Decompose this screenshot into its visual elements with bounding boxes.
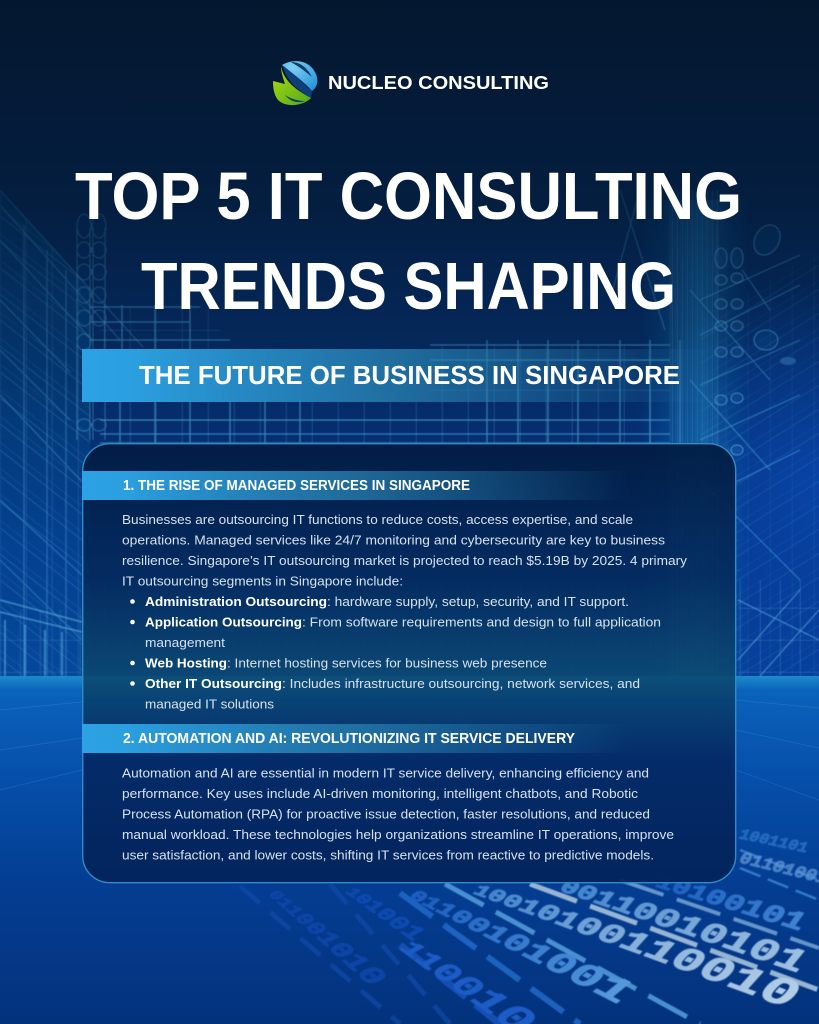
wireframe buildings background — [0, 190, 819, 680]
brand name: NUCLEO CONSULTING — [328, 73, 549, 93]
section 1 paragraph: IT outsourcing segments in Singapore include: — [122, 574, 403, 588]
row upper right: 10100101 — [649, 867, 813, 938]
section 1 bullet list — [130, 594, 661, 712]
section 1 bullet list: managed IT solutions — [145, 696, 274, 712]
content panel — [82, 444, 736, 883]
section 1 paragraph: resilience. Singapore’s IT outsourcing market is projected to reach $5.19B by 2025. 4 primary — [122, 553, 687, 568]
left ellipse towers — [77, 214, 106, 440]
section 1 bullet list: Administration Outsourcing — [145, 594, 327, 609]
central low building — [90, 305, 740, 676]
section 1 bullet list: management — [145, 635, 225, 650]
section 1 paragraph: Businesses are outsourcing IT functions to reduce costs, access expertise, and scale — [122, 512, 633, 527]
section 2 header bar: 2. AUTOMATION AND AI: REVOLUTIONIZING IT SERVICE DELIVERY — [123, 731, 575, 747]
title: TRENDS SHAPING — [141, 249, 676, 324]
subtitle banner: THE FUTURE OF BUSINESS IN SINGAPORE — [139, 360, 680, 390]
icon: globe logo — [273, 61, 317, 105]
section 1 bullet list: Web Hosting — [145, 656, 227, 670]
ground plane with horizon — [0, 676, 819, 1024]
section 2 paragraph: user satisfaction, and lower costs, shifting IT services from reactive to predictive models. — [122, 848, 654, 862]
section 2 paragraph: Automation and AI are essential in modern IT service delivery, enhancing efficiency and — [122, 766, 649, 780]
section 2 paragraph: manual workload. These technologies help organizations streamline IT operations, improve — [122, 827, 674, 842]
section 2 paragraph: Process Automation (RPA) for proactive issue detection, faster resolutions, and reduced — [122, 806, 650, 822]
left building — [0, 190, 143, 676]
row faded left b: 101001 — [338, 882, 431, 946]
right dense towers — [610, 190, 819, 680]
section 1 bullet list: : From software requirements and design to full application — [302, 614, 661, 630]
logo — [273, 61, 549, 105]
title: TOP 5 IT CONSULTING — [75, 159, 742, 234]
row main a: 00110010101 — [551, 867, 817, 981]
section 1 bullet list: : Includes infrastructure outsourcing, network services, and — [282, 676, 640, 691]
row main b: 10010100110010 — [463, 866, 811, 1018]
row main c: 01100101001 — [398, 876, 644, 1012]
section 1 paragraph: operations. Managed services like 24/7 monitoring and cybersecurity are key to business — [122, 532, 665, 548]
subtitle banner — [82, 349, 722, 402]
title — [75, 159, 742, 324]
section 1 bullet list: Application Outsourcing — [145, 614, 302, 630]
section 1 header bar: 1. THE RISE OF MANAGED SERVICES IN SINGAPORE — [123, 478, 470, 494]
section 2 header bar — [82, 724, 627, 753]
section 2 paragraph: performance. Key uses include AI-driven monitoring, intelligent chatbots, and Robotic — [122, 786, 638, 801]
section 1 header bar — [82, 471, 627, 500]
section 1 bullet list: Other IT Outsourcing — [145, 676, 282, 691]
binary digit rows — [240, 827, 819, 1024]
section 2 paragraph — [122, 766, 674, 862]
section 1 paragraph — [122, 512, 687, 588]
section 1 bullet list: : Internet hosting services for business web presence — [227, 656, 547, 670]
section 1 bullet list: : hardware supply, setup, security, and IT support. — [327, 594, 629, 609]
row faded left a: 011001010 — [259, 883, 395, 990]
rows beside panel: 1001101 — [736, 827, 811, 857]
